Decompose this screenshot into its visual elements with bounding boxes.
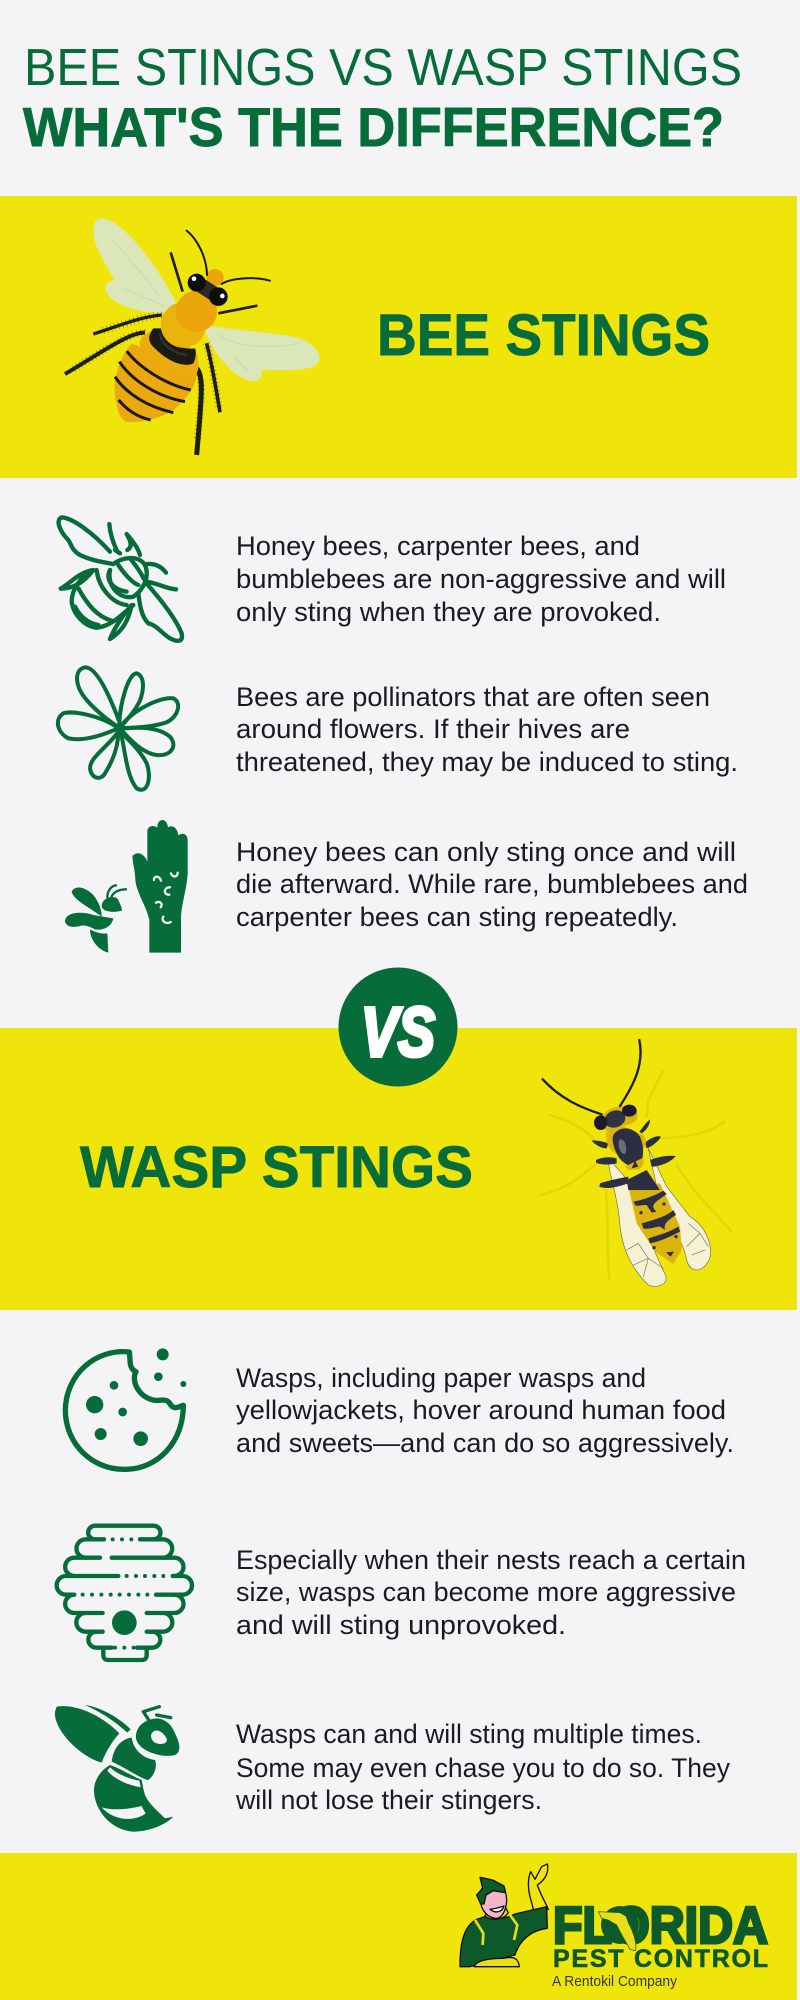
icon: bitten cookie (65, 1348, 186, 1469)
text: wasps hover around food (236, 1363, 734, 1458)
badge: VS (338, 968, 458, 1086)
text: wasps hover around food: and sweets—and can do so aggressively. (236, 1428, 734, 1458)
illustration: honey bee (65, 218, 320, 455)
tagline: A Rentokil Company (552, 1973, 677, 1990)
text: wasps sting multiple times: Some may even chase you to do so. They (236, 1753, 731, 1783)
text: honey bees sting once (236, 837, 748, 932)
badge: VS: VS (361, 993, 435, 1071)
icon: bee and stung hand (65, 820, 188, 953)
text: honey bees sting once: carpenter bees can sting repeatedly. (236, 902, 678, 932)
O disc with state of Florida (598, 1906, 639, 1951)
text: bees non-aggressive: only sting when they are provoked. (236, 597, 661, 627)
title line 1: BEE STINGS VS WASP STINGS (24, 39, 742, 97)
text: bees non-aggressive (236, 531, 726, 627)
hand with stings (132, 820, 188, 953)
small bee (65, 885, 126, 953)
text: wasps hover around food: yellowjackets, hover around human food (236, 1395, 726, 1425)
text: honey bees sting once: Honey bees can only sting once and will (236, 837, 736, 867)
text: bees non-aggressive: Honey bees, carpenter bees, and (236, 531, 640, 561)
icon: beehive (57, 1526, 192, 1660)
panel: footer (0, 1853, 797, 2000)
text: bees are pollinators (236, 682, 738, 777)
wordmark PEST CONTROL: PEST CONTROL (553, 1945, 768, 1973)
icon: solid wasp (55, 1705, 179, 1832)
text: wasps sting multiple times: Wasps can and will sting multiple times. (236, 1719, 702, 1749)
text: nests aggressive: and will sting unprovoked. (236, 1610, 566, 1640)
text: wasps sting multiple times: will not lose their stingers. (235, 1785, 542, 1815)
panel: wasp stings banner (0, 1028, 797, 1310)
text: wasps sting multiple times (235, 1719, 731, 1815)
text: bees non-aggressive: bumblebees are non-aggressive and will (236, 564, 726, 594)
heading: bee stings: BEE STINGS (377, 303, 710, 368)
icon: outline bee (59, 517, 182, 641)
text: bees are pollinators: around flowers. If their hives are (236, 714, 630, 744)
logo: Florida Pest Control (460, 1864, 768, 1990)
title line 2: WHAT'S THE DIFFERENCE? (23, 96, 724, 158)
text: nests aggressive: size, wasps can become more aggressive (236, 1577, 736, 1607)
text: nests aggressive (236, 1545, 746, 1640)
panel: bee stings banner (0, 196, 797, 478)
text: bees are pollinators: threatened, they may be induced to sting. (236, 747, 738, 777)
text: nests aggressive: Especially when their nests reach a certain (236, 1545, 746, 1575)
wordmark FLORIDA: FLORIDA (553, 1897, 768, 1955)
mascot (460, 1864, 548, 1967)
heading: wasp stings: WASP STINGS (80, 1135, 473, 1200)
icon: flower (58, 667, 178, 790)
title (23, 39, 742, 158)
illustration: wasp (540, 1040, 731, 1286)
text: honey bees sting once: die afterward. While rare, bumblebees and (236, 869, 748, 899)
text: bees are pollinators: Bees are pollinators that are often seen (236, 682, 710, 712)
text: wasps hover around food: Wasps, including paper wasps and (236, 1363, 646, 1393)
